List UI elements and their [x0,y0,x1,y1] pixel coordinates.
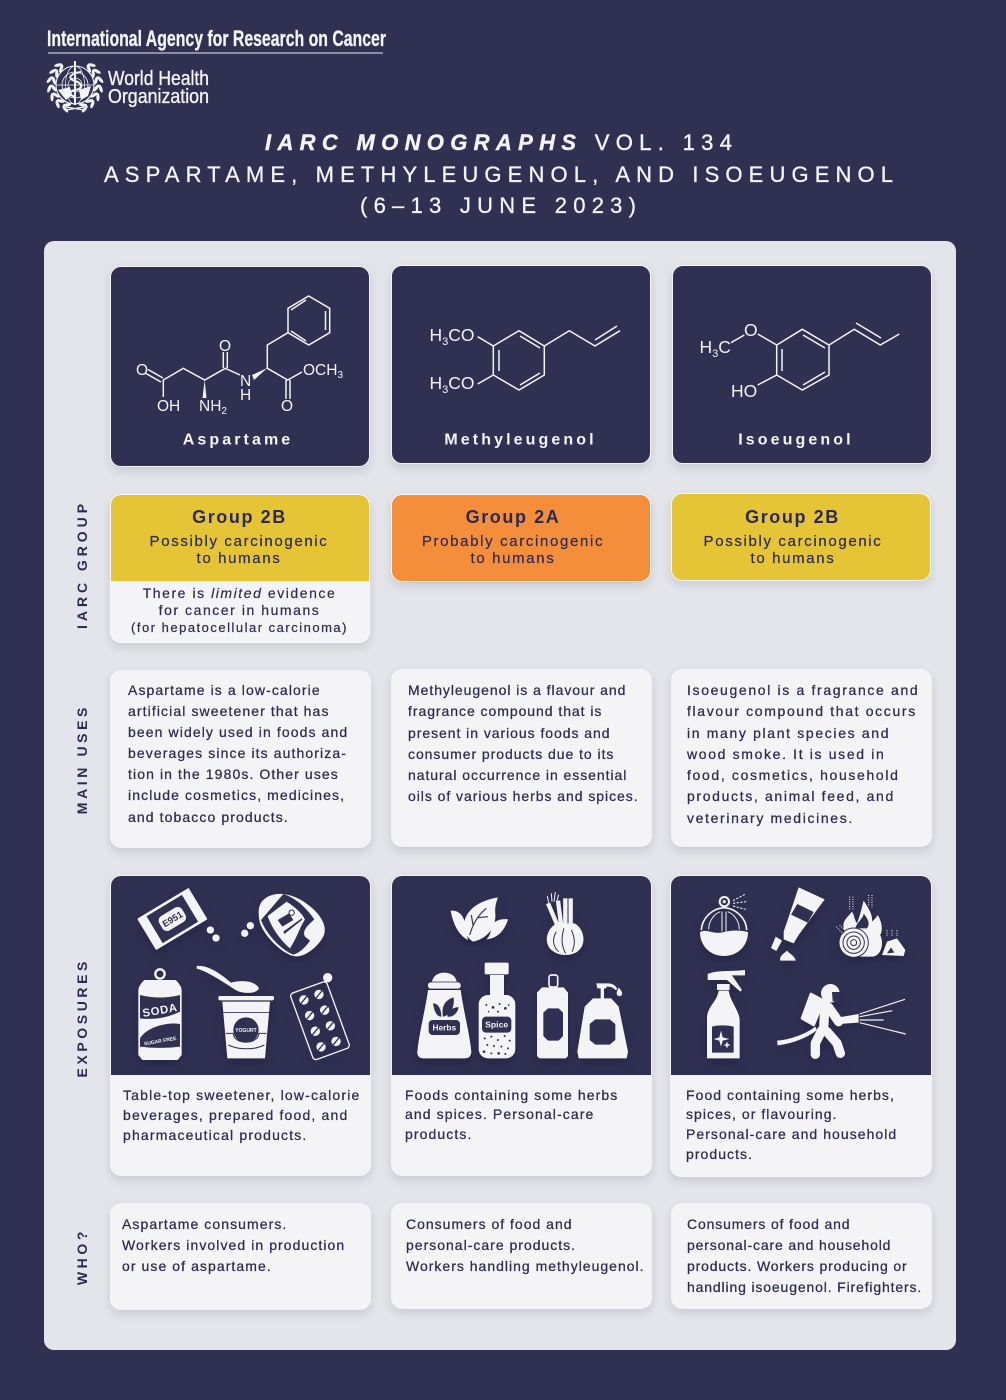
group 2A description [422,533,604,566]
panel: methyleugenol who [391,1203,652,1309]
icon: leaves [450,897,508,941]
icon: sweetener drops [206,922,254,941]
text: isoeugenol exposures [686,1086,897,1162]
molecule: methyleugenol: H [429,324,442,344]
icon: spoon [196,965,258,992]
molecule: methyleugenol: 3 [442,384,448,396]
molecule: aspartame: O [280,398,293,414]
text: aspartame who [122,1216,345,1274]
text: methyleugenol uses: natural occurrence in essential [408,767,627,783]
side label: main uses: MAIN USES [74,704,90,814]
label: methyleugenol: Methyleugenol [444,431,596,448]
header: IARC and WHO logos: Organization [108,85,209,108]
molecule: aspartame: O [218,338,231,354]
group 2B heading: Group 2B [745,507,840,527]
group 2B description: to humans [197,550,281,566]
text: methyleugenol uses [408,682,639,804]
text: isoeugenol who: products. Workers producing or [687,1258,908,1274]
icon: herbs shaker: Herbs [432,1022,456,1032]
text: isoeugenol uses: wood smoke. It is used in [687,746,885,762]
label: isoeugenol: Isoeugenol [738,431,853,448]
text: isoeugenol exposures: Personal-care and household [686,1126,897,1142]
text: isoeugenol who: personal-care and household [687,1237,891,1253]
molecule: isoeugenol [699,320,899,400]
icon: soda can: SODA [141,1002,178,1019]
title: IARC MONOGRAPHS VOL. 134 [265,130,732,155]
molecule: methyleugenol: CO [448,372,474,392]
icon: herbs shaker [417,972,471,1058]
text: isoeugenol uses: products, animal feed, and [687,788,895,804]
molecule: aspartame: O [136,362,148,378]
molecule: aspartame: NH [198,398,221,414]
evidence note: There is limited evidence [143,585,336,601]
icon: WHO emblem [45,60,105,114]
molecule: aspartame [136,296,343,416]
text: aspartame exposures: beverages, prepared food, and [123,1107,348,1123]
panel: isoeugenol exposures [670,875,932,1177]
panel: isoeugenol who [671,1203,932,1309]
side label: exposures: EXPOSURES [74,958,90,1078]
text: methyleugenol who: Consumers of food and [406,1216,573,1232]
icon: sachet E951: E951 [160,909,184,929]
text: isoeugenol uses [686,682,919,826]
molecule: methyleugenol: CO [448,324,474,344]
panel: group 2B isoeugenol [671,493,931,581]
icon: soda can [138,969,181,1060]
group 2B description [704,533,882,566]
label: aspartame: Aspartame [182,431,293,448]
text: aspartame uses: include cosmetics, medicines, [128,787,345,803]
icon: spice bottle: Spice [485,1019,508,1029]
icon: spice bottle [478,962,515,1058]
text: isoeugenol uses: flavour compound that occurs [687,703,917,719]
text: methyleugenol uses: fragrance compound that is [408,703,602,719]
molecule: aspartame: H [240,386,251,404]
icon: pump bottle [577,983,628,1058]
text: methyleugenol uses: Methyleugenol is a flavour and [408,682,626,698]
text: aspartame who: or use of aspartame. [122,1258,272,1274]
text: aspartame uses: and tobacco products. [128,809,289,825]
text: aspartame uses: Aspartame is a low-calorie [128,682,321,698]
group 2B description [150,533,328,566]
yellow band [111,495,369,581]
text: methyleugenol exposures: and spices. Personal-care [405,1106,594,1122]
group 2A description: to humans [471,550,555,566]
molecule: isoeugenol: H [699,336,712,356]
text: isoeugenol exposures: spices, or flavouring. [686,1106,838,1122]
molecule: isoeugenol: C [718,336,730,356]
text: aspartame exposures [123,1087,360,1144]
molecule: methyleugenol: H [429,372,442,392]
text: aspartame who: Workers involved in production [122,1237,345,1253]
illustration: isoeugenol exposure icons [670,875,932,1075]
icon: coffee sweetener dispenser [258,893,324,956]
text: methyleugenol uses: oils of various herbs and spices. [408,788,639,804]
text: methyleugenol uses: present in various foods and [408,725,610,741]
text: isoeugenol uses: veterinary medicines. [687,810,854,826]
text: methyleugenol exposures: products. [405,1126,472,1142]
icon: burning log [836,894,905,957]
text: methyleugenol uses: consumer products due to its [408,746,614,762]
icon: perfume bottle [700,894,748,956]
text: isoeugenol exposures: Food containing some herbs, [686,1086,895,1102]
molecule: aspartame: OH [156,398,180,414]
molecule: methyleugenol [429,324,620,396]
text: aspartame uses: artificial sweetener that has [128,703,330,719]
title [104,130,893,218]
text: isoeugenol who: handling isoeugenol. Firefighters. [687,1279,922,1295]
text: aspartame uses: tion in the 1980s. Other uses [128,766,339,782]
illustration: aspartame exposure icons [110,875,371,1075]
panel: isoeugenol uses [671,669,932,847]
illustration: methyleugenol exposure icons [391,875,652,1075]
icon: sachet E951 [137,887,207,950]
panel: aspartame uses [110,670,371,848]
text: methyleugenol who [406,1216,645,1274]
group 2A heading: Group 2A [466,507,560,527]
text: aspartame who: Aspartame consumers. [122,1216,287,1232]
text: isoeugenol uses: in many plant species and [687,725,890,741]
icon: cream tube [770,887,824,960]
text: methyleugenol who: personal-care products. [406,1237,576,1253]
panel: methyleugenol structure [391,265,651,464]
text: methyleugenol who: Workers handling methyleugenol. [406,1258,645,1274]
text: aspartame exposures: pharmaceutical products. [123,1127,308,1143]
side label: who: WHO? [74,1228,90,1285]
icon: yogurt cup [218,996,274,1058]
evidence note: (for hepatocellular carcinoma) [131,620,348,635]
agency name: International Agency for Research on Cancer [47,26,386,51]
icon: soda can: SUGAR FREE [143,1035,177,1047]
panel: aspartame who [110,1203,371,1310]
text: aspartame uses: been widely used in foods and [128,724,348,740]
title: ASPARTAME, METHYLEUGENOL, AND ISOEUGENOL [104,162,893,187]
group 2B description: to humans [751,550,835,566]
panel: group 2A methyleugenol [391,494,651,582]
panel: methyleugenol exposures [391,875,652,1176]
group 2B description: Possibly carcinogenic [150,533,328,550]
panel: group 2B aspartame [110,494,370,643]
text: isoeugenol uses: Isoeugenol is a fragrance and [687,682,919,698]
icon: firefighter with hose [776,984,905,1054]
molecule: isoeugenol: 3 [712,348,718,360]
text: aspartame exposures: Table-top sweetener, low-calorie [123,1087,360,1103]
molecule: aspartame: N [240,372,251,390]
molecule: isoeugenol: O [744,320,757,340]
icon: personal-care bottle [536,974,568,1058]
molecule: methyleugenol: 3 [442,336,448,348]
evidence note [131,585,348,635]
text: aspartame uses [128,682,348,826]
panel: aspartame structure [110,266,370,467]
text: isoeugenol uses: food, cosmetics, household [687,767,900,783]
molecule: aspartame: OCH [302,362,337,378]
text: methyleugenol exposures: Foods containing some herbs [405,1086,618,1102]
text: isoeugenol who: Consumers of food and [687,1216,850,1232]
icon: yogurt cup: YOGURT [235,1028,256,1034]
evidence note: for cancer in humans [159,602,320,618]
group 2A description: Probably carcinogenic [422,533,604,550]
text: methyleugenol exposures [405,1086,618,1142]
panel: isoeugenol structure [672,265,932,464]
text: isoeugenol exposures: products. [686,1146,753,1162]
header: IARC and WHO logos [46,26,386,112]
group 2B heading: Group 2B [192,507,287,527]
icon: spray bottle [706,970,744,1058]
side label: IARC group: IARC GROUP [74,500,90,629]
background panel [44,241,956,1350]
molecule: isoeugenol: HO [730,380,757,400]
panel: methyleugenol uses [391,669,652,847]
text: aspartame uses: beverages since its authoriza- [128,745,347,761]
WHO name: World Health [108,67,209,90]
group 2B description: Possibly carcinogenic [704,533,882,550]
icon: blister pack [289,980,350,1060]
panel: aspartame exposures [110,875,371,1176]
text: isoeugenol who [687,1216,922,1296]
icon: fennel bulb [546,892,583,955]
molecule: aspartame: 2 [221,406,227,416]
title: (6–13 JUNE 2023) [360,193,636,218]
molecule: aspartame: 3 [337,370,343,380]
